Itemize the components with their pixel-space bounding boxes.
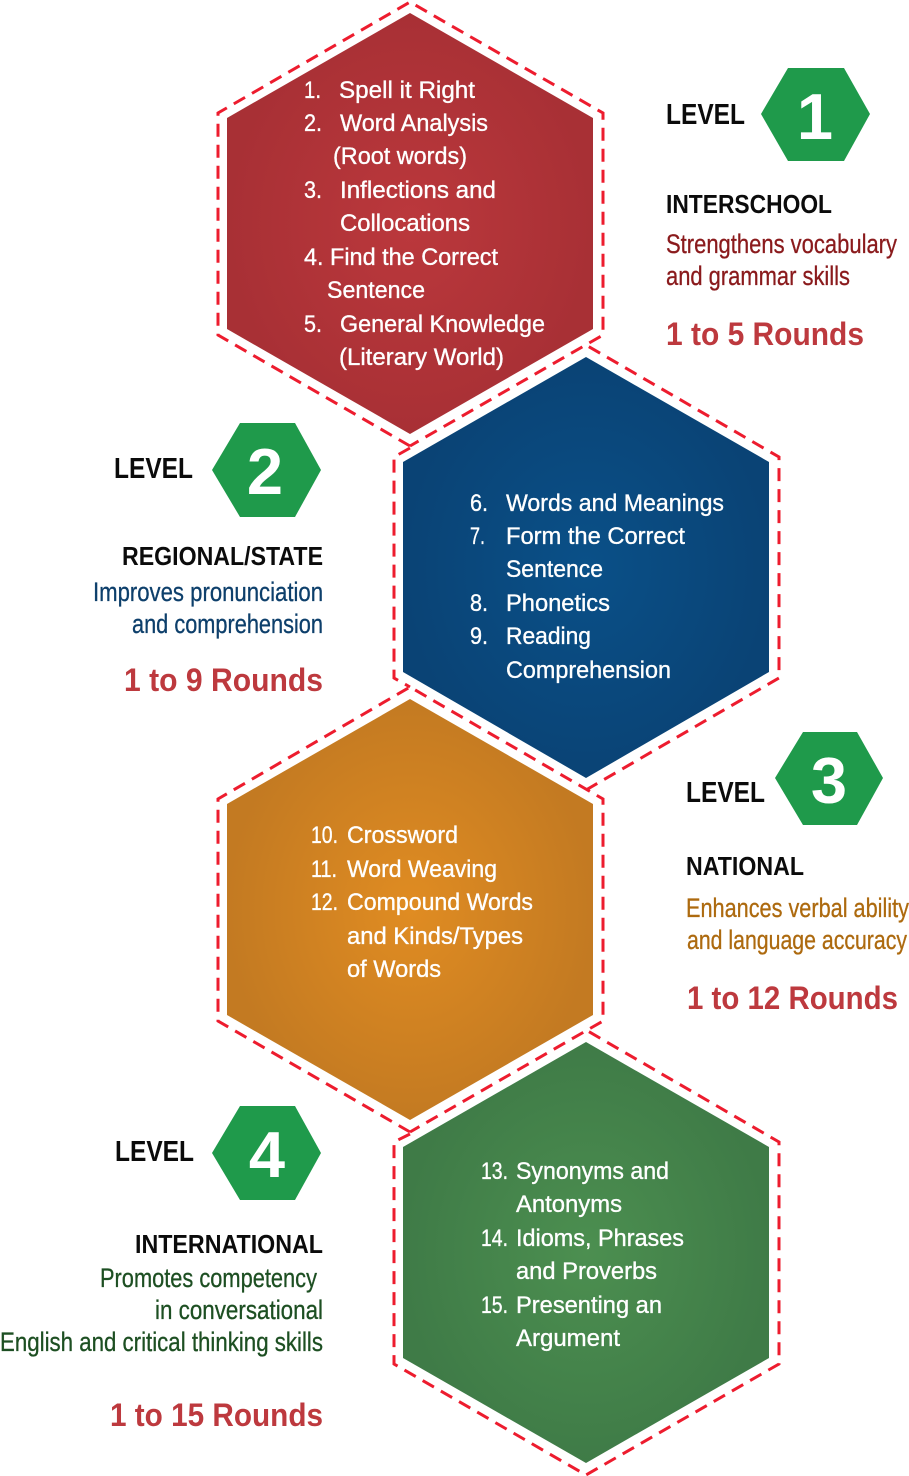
panel: orange hexagon, level 3 rounds: and Kinds/Types [347,923,523,950]
panel: level 2 description: 2 [247,435,283,508]
panel: green hexagon, level 4 rounds: 15. [481,1292,508,1319]
panel: level 4 description: in conversational [155,1295,323,1325]
panel: level 4 description [0,1106,323,1433]
panel: blue hexagon, level 2 rounds: 8. [470,590,488,617]
panel: green hexagon, level 4 rounds: Argument [516,1325,620,1352]
panel: red hexagon, level 1 rounds: Spell it Right [339,77,475,104]
panel: blue hexagon, level 2 rounds [394,345,779,790]
panel: red hexagon, level 1 rounds: 1. [304,77,321,104]
panel: level 1 description: and grammar skills [666,261,850,291]
panel: level 3 description: NATIONAL [686,851,804,881]
panel: level 2 description: 1 to 9 Rounds [124,662,323,698]
panel: level 4 description: Promotes competency [100,1263,317,1293]
panel: green hexagon, level 4 rounds: and Proverbs [516,1258,657,1285]
panel: blue hexagon, level 2 rounds: Form the Correct [506,523,685,550]
panel: level 3 description: 3 [811,744,847,817]
panel: orange hexagon, level 3 rounds: 10. [311,822,338,849]
panel: level 2 description: and comprehension [132,609,323,639]
panel: level 1 description: 1 to 5 Rounds [666,316,864,352]
panel: red hexagon, level 1 rounds: Inflections and [340,177,496,204]
panel: level 2 description: LEVEL [114,453,193,485]
panel: level 1 description [666,68,897,352]
panel: blue hexagon, level 2 rounds: 7. [470,523,485,550]
panel: orange hexagon, level 3 rounds: Word Weaving [347,856,497,883]
panel: blue hexagon, level 2 rounds: 6. [470,490,488,517]
panel: blue hexagon, level 2 rounds: Phonetics [506,590,610,617]
panel: blue hexagon, level 2 rounds: 9. [470,623,488,650]
panel: level 4 description: 4 [249,1118,285,1191]
panel: orange hexagon, level 3 rounds [218,687,603,1132]
panel: level 4 description: 1 to 15 Rounds [110,1397,323,1433]
panel: level 2 description: Improves pronunciation [93,577,323,607]
panel: level 2 description [93,423,323,698]
panel: level 4 description: LEVEL [115,1136,194,1168]
panel: level 2 description: REGIONAL/STATE [122,541,323,571]
panel: green hexagon, level 4 rounds: Idioms, Phrases [516,1225,684,1252]
panel: blue hexagon, level 2 rounds: Comprehension [506,657,671,684]
panel: red hexagon, level 1 rounds: 4. Find the Correct [304,244,498,271]
panel: green hexagon, level 4 rounds: Antonyms [516,1191,622,1218]
panel: red hexagon, level 1 rounds: Word Analysis [340,110,488,137]
panel: green hexagon, level 4 rounds [394,1030,779,1475]
panel: red hexagon, level 1 rounds: General Knowledge [340,311,545,338]
panel: level 4 description: INTERNATIONAL [135,1229,323,1259]
panel: orange hexagon, level 3 rounds: 11. [311,856,337,883]
panel: red hexagon, level 1 rounds: (Root words) [333,143,467,170]
panel: level 1 description: INTERSCHOOL [666,189,832,219]
panel: level 4 description: English and critical thinking skills [0,1327,323,1357]
panel: red hexagon, level 1 rounds: 5. [304,311,322,338]
panel: green hexagon, level 4 rounds: Presenting an [516,1292,662,1319]
panel: red hexagon, level 1 rounds: (Literary World) [339,344,504,371]
panel: blue hexagon, level 2 rounds: Reading [506,623,591,650]
panel: orange hexagon, level 3 rounds: Crossword [347,822,458,849]
panel: orange hexagon, level 3 rounds: 12. [311,889,338,916]
panel: green hexagon, level 4 rounds: 13. [481,1158,508,1185]
panel: red hexagon, level 1 rounds: 3. [304,177,322,204]
panel: orange hexagon, level 3 rounds: of Words [347,956,441,983]
panel: red hexagon, level 1 rounds [218,2,603,446]
panel: red hexagon, level 1 rounds: Collocations [340,210,470,237]
panel: level 1 description: 1 [797,80,833,153]
panel: red hexagon, level 1 rounds: Sentence [327,277,425,304]
panel: blue hexagon, level 2 rounds: Sentence [506,556,603,583]
panel: blue hexagon, level 2 rounds: Words and Meanings [506,490,724,517]
panel: red hexagon, level 1 rounds: 2. [304,110,322,137]
panel: green hexagon, level 4 rounds: 14. [481,1225,508,1252]
panel: level 1 description: LEVEL [666,99,745,131]
panel: orange hexagon, level 3 rounds: Compound Words [347,889,533,916]
panel: level 3 description [686,732,909,1016]
panel: green hexagon, level 4 rounds: Synonyms and [516,1158,669,1185]
panel: level 3 description: LEVEL [686,777,765,809]
